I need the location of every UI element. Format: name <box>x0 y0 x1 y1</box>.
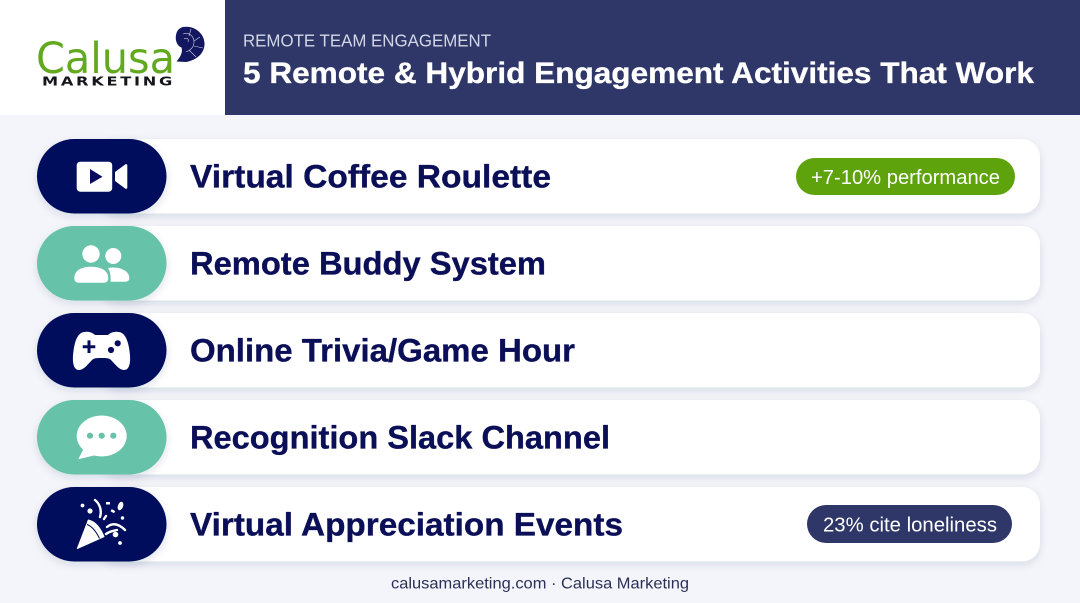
pill: chat icon <box>37 400 166 474</box>
pill: gamepad icon <box>37 313 166 388</box>
label: Recognition Slack Channel <box>190 420 610 456</box>
pill: video icon <box>37 139 166 214</box>
row 5: Virtual Appreciation Events <box>37 487 1040 562</box>
badge: 23% cite loneliness: 23% cite loneliness <box>823 515 997 537</box>
pill: people icon <box>37 226 166 300</box>
logo wordmark: Calusa: Calusa <box>36 35 175 84</box>
pill: party popper icon <box>37 487 166 562</box>
header banner <box>225 0 1080 115</box>
logo panel <box>0 0 225 115</box>
logo wordmark: Marketing: MARKETING <box>42 74 175 88</box>
row 3: Online Trivia/Game Hour <box>37 313 1040 388</box>
row 4: Recognition Slack Channel <box>37 400 1040 474</box>
row 2: Remote Buddy System <box>37 226 1040 300</box>
badge: 23% cite loneliness <box>807 505 1012 543</box>
badge: +7-10% performance <box>796 158 1015 195</box>
label: Online Trivia/Game Hour <box>190 333 575 369</box>
label: Remote Buddy System <box>190 246 546 282</box>
label: Virtual Coffee Roulette <box>190 159 551 195</box>
logo icon: nautilus shell <box>176 27 205 62</box>
footer: calusamarketing.com · Calusa Marketing <box>391 576 689 592</box>
row 1: Virtual Coffee Roulette <box>37 139 1040 214</box>
badge: +7-10% performance: +7-10% performance <box>811 166 1000 189</box>
title: 5 Remote & Hybrid Engagement Activities That Work <box>243 57 1034 90</box>
eyebrow: REMOTE TEAM ENGAGEMENT <box>243 30 491 50</box>
label: Virtual Appreciation Events <box>190 507 623 543</box>
